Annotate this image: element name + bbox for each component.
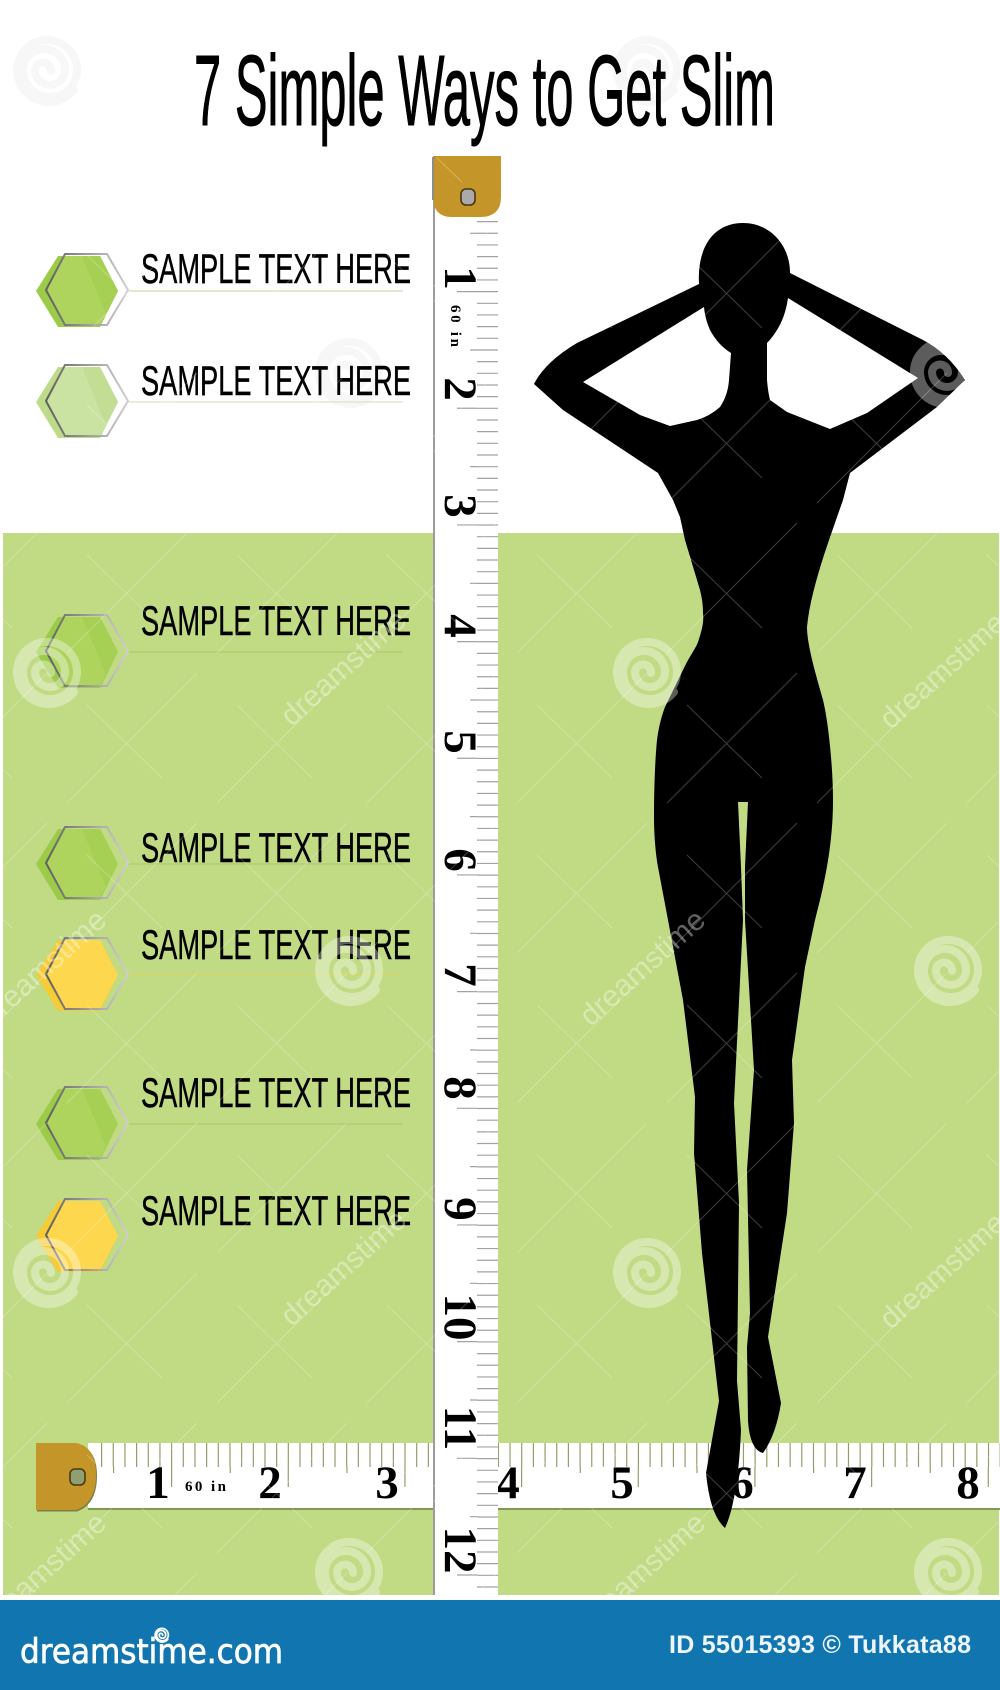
item 3: SAMPLE TEXT HERE: [141, 597, 411, 644]
vertical measuring tape: 12: [434, 1526, 486, 1574]
tape end cap: [36, 1443, 97, 1512]
item 7: [36, 1187, 411, 1272]
faint watermark spirals on white: [17, 40, 677, 404]
horizontal measuring tape: [36, 1443, 1000, 1512]
watermark: spirals: [17, 342, 978, 1604]
item 7: SAMPLE TEXT HERE: [141, 1187, 411, 1234]
vertical measuring tape: 7: [434, 963, 486, 987]
tape numbers: 1: [146, 1457, 170, 1509]
tape numbers: 1: [434, 266, 486, 290]
vertical measuring tape: 8: [434, 1076, 486, 1100]
footer bar: [0, 1600, 1000, 1690]
item 5: SAMPLE TEXT HERE: [141, 921, 411, 968]
item 4: [36, 824, 411, 900]
watermark: dreamstime text: dreamstime: [274, 1203, 413, 1333]
vertical measuring tape: 3: [434, 494, 486, 518]
panel: green background: [3, 533, 999, 1595]
vertical measuring tape: 4: [434, 614, 486, 638]
vertical measuring tape: 9: [434, 1197, 486, 1221]
item 4: SAMPLE TEXT HERE: [141, 824, 411, 871]
horizontal measuring tape: 5: [610, 1457, 634, 1509]
vertical measuring tape: [433, 156, 501, 1595]
horizontal measuring tape: 2: [258, 1457, 282, 1509]
tape length label: 60 in: [185, 1479, 227, 1495]
footer image id: ID 55015393 © Tukkata88: [669, 1631, 971, 1659]
tape ticks: [101, 1455, 1000, 1477]
watermark: dreamstime text: dreamstime: [573, 1506, 712, 1636]
horizontal measuring tape: 7: [843, 1457, 867, 1509]
silhouette of slim woman: [534, 223, 965, 1528]
item 6: [36, 1069, 411, 1160]
vertical measuring tape: 10: [434, 1294, 486, 1340]
watermark: dreamstime text: [0, 603, 1000, 1636]
horizontal measuring tape: 8: [956, 1457, 980, 1509]
item 3: [36, 597, 411, 688]
watermark: dreamstime text: dreamstime: [573, 903, 712, 1033]
horizontal measuring tape: 4: [496, 1457, 520, 1509]
watermark: dreamstime text: dreamstime: [274, 603, 413, 733]
tape ticks: [467, 221, 488, 1590]
tape length label: 60 in: [447, 305, 463, 348]
item 2: [36, 357, 411, 438]
item 1: [36, 245, 411, 327]
item 6: SAMPLE TEXT HERE: [141, 1069, 411, 1116]
list: seven sample items: [36, 245, 411, 1272]
tape end cap: [433, 156, 501, 217]
vertical measuring tape: 6: [434, 848, 486, 872]
vertical measuring tape: 5: [434, 730, 486, 754]
item 2: SAMPLE TEXT HERE: [141, 357, 411, 404]
horizontal measuring tape: 3: [375, 1457, 399, 1509]
vertical measuring tape: 2: [434, 377, 486, 401]
vertical measuring tape: 11: [434, 1406, 486, 1450]
footer logo: dreamstime.com: [20, 1632, 283, 1672]
item 1: SAMPLE TEXT HERE: [141, 245, 411, 292]
item 5: [36, 921, 411, 1011]
horizontal measuring tape: 6: [730, 1457, 754, 1509]
